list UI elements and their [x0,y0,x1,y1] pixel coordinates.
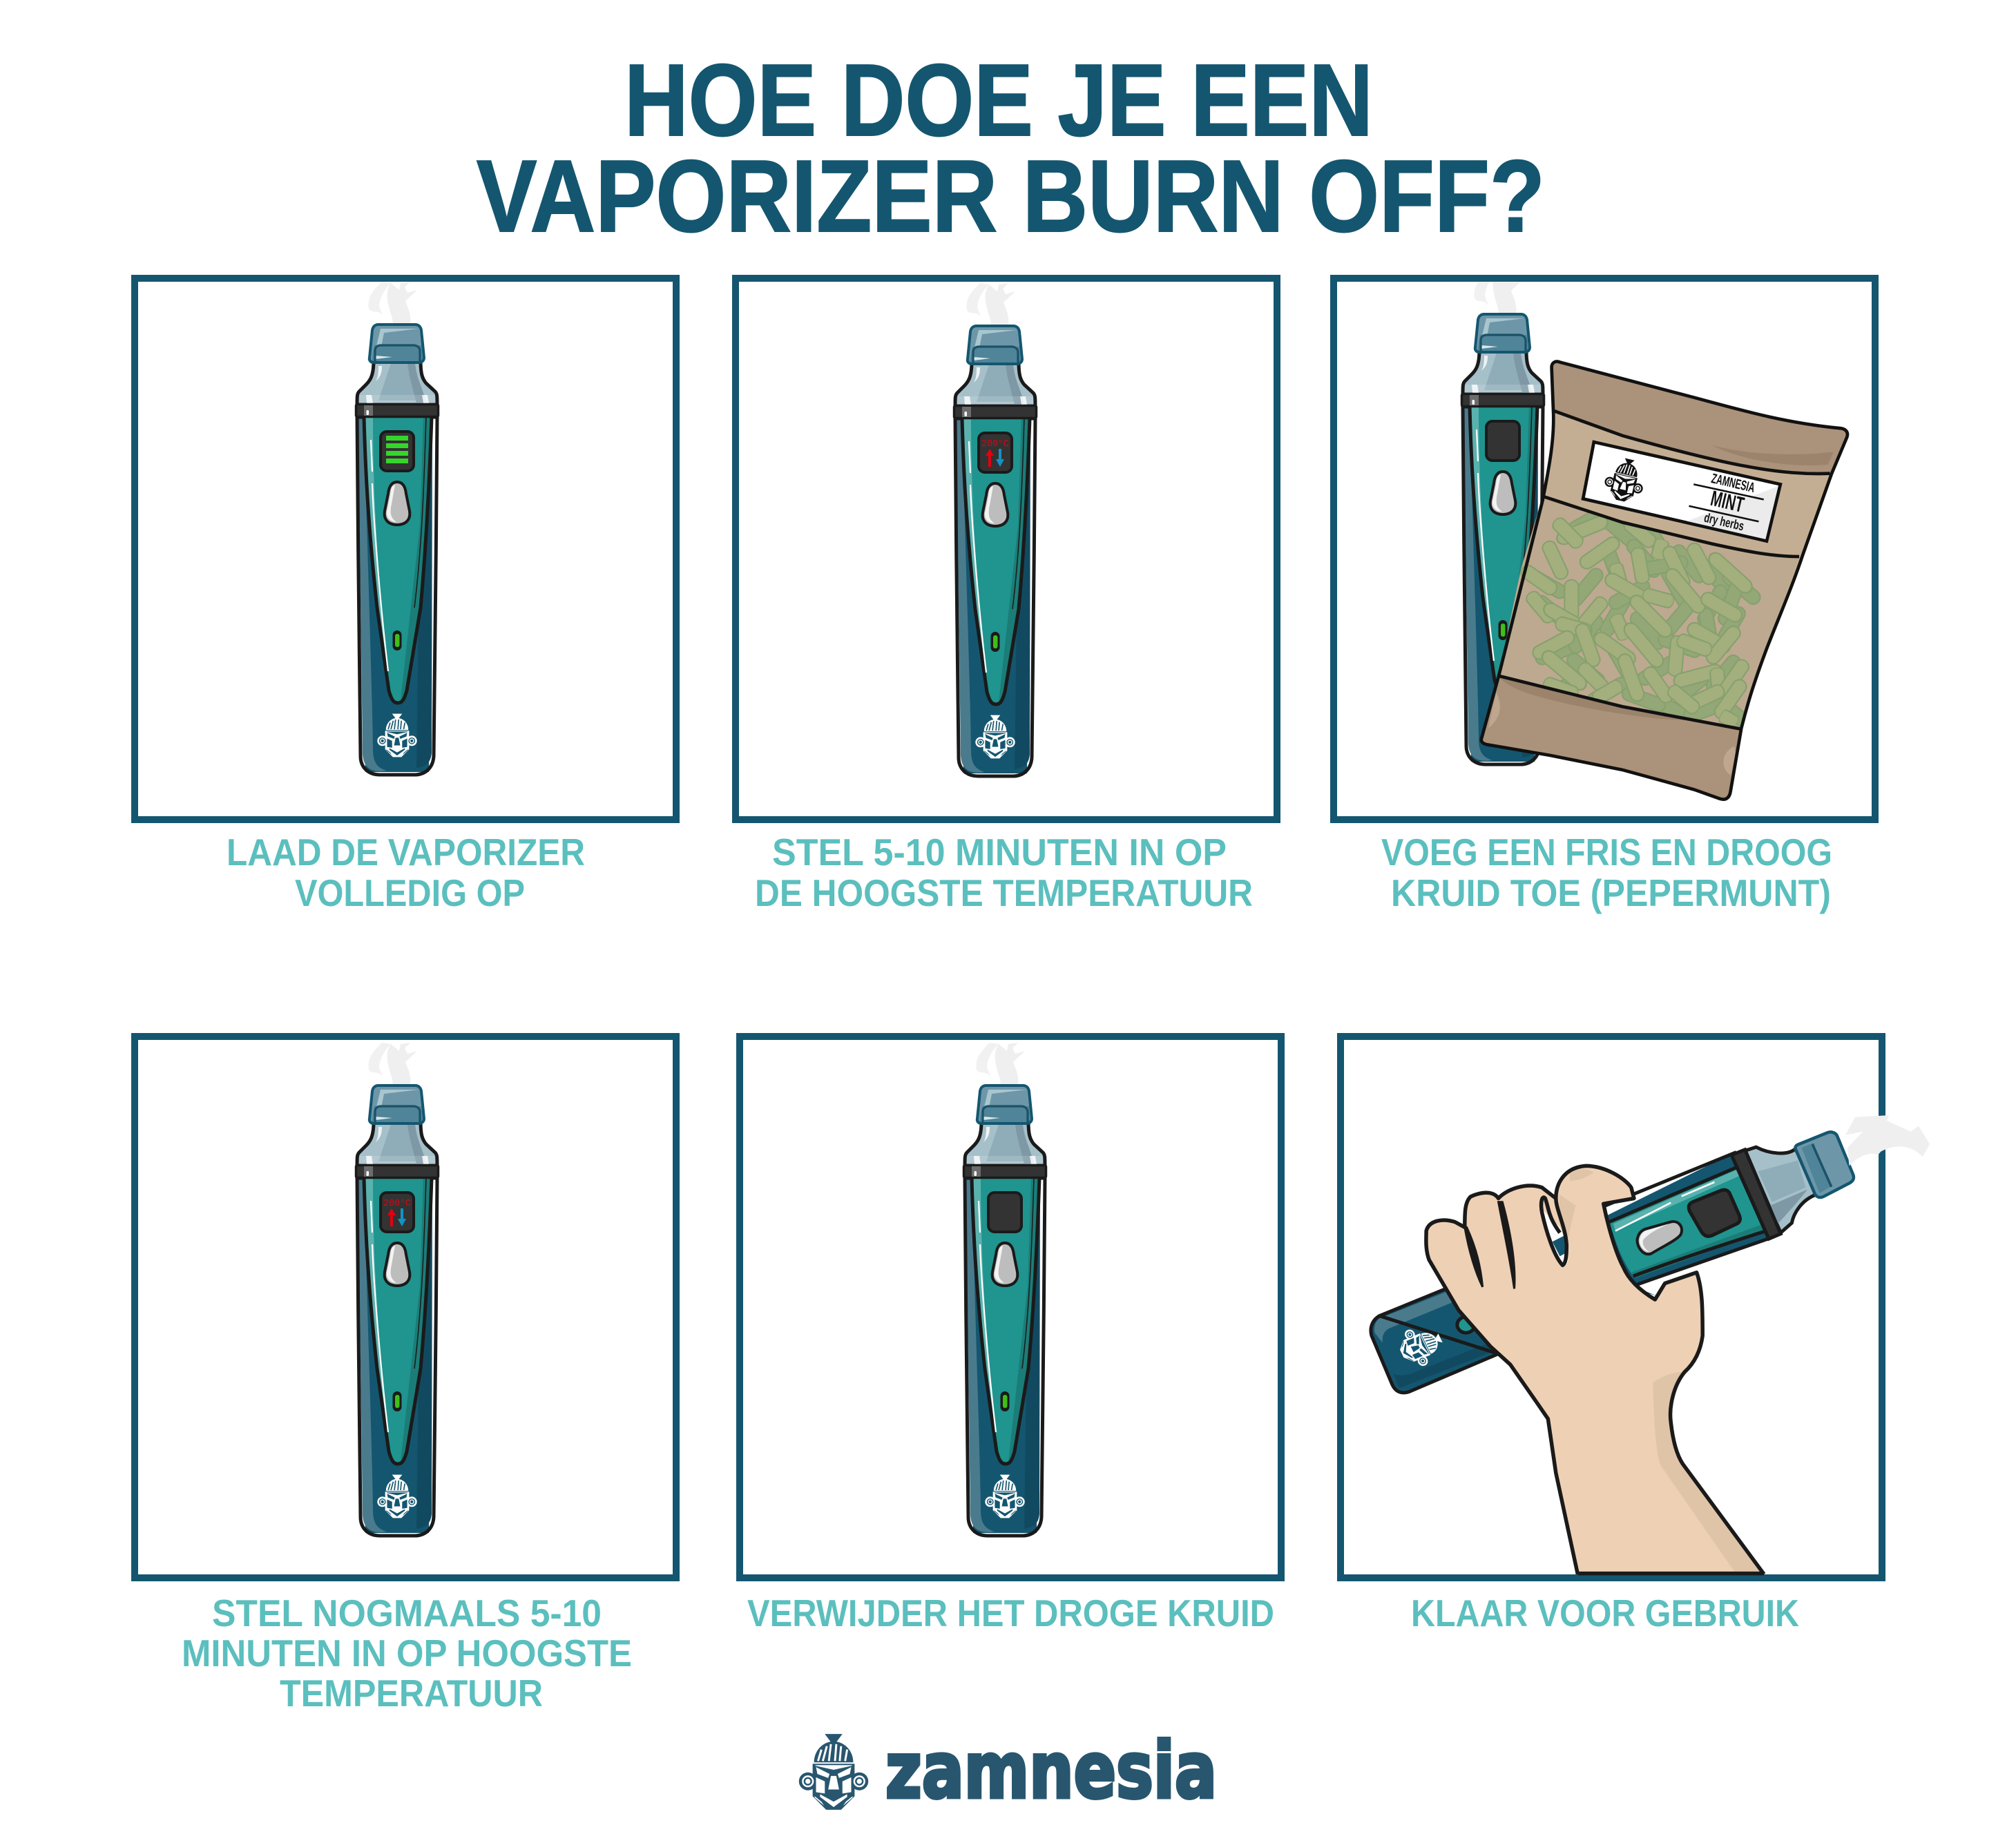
smoke [368,282,417,324]
bag outline [1481,362,1847,800]
caption: step 4 [182,1592,632,1715]
caption: step 3: VOEG EEN FRIS EN DROOG [1381,831,1832,874]
bag label: MINT [1709,486,1746,517]
herbs [1519,505,1763,731]
vaporizer lower part [1371,1285,1499,1393]
smoke [1845,1115,1930,1166]
icon: vaporizer blank screen [964,1043,1046,1536]
caption: step 1 [227,831,585,914]
panel: step 3 [1334,271,1875,820]
title: HOE DOE JE EEN [624,44,1373,157]
caption: step 1: VOLLEDIG OP [295,871,525,914]
wordmark: zamnesia [885,1726,1217,1816]
caption: step 4: STEL NOGMAALS 5-10 [212,1592,602,1634]
bag top seal [1552,362,1847,474]
bag label [1583,442,1780,541]
caption: step 2: DE HOOGSTE TEMPERATUUR [755,871,1253,914]
icon: vaporizer temperature [356,1043,438,1536]
screen: battery bars [381,432,414,471]
caption: step 2: STEL 5-10 MINUTEN IN OP [772,831,1227,874]
panel: step 5 [740,1036,1281,1578]
caption: step 4: TEMPERATUUR [280,1672,543,1715]
caption: step 2 [755,831,1253,914]
screen: temperature [979,433,1012,472]
icon: vaporizer temperature [954,283,1036,776]
hand [1426,1166,1764,1574]
icon: hand holding vaporizer [1371,1115,1930,1574]
bag label: ZAMNESIA [1710,471,1756,496]
title [477,44,1545,253]
caption: step 6: KLAAR VOOR GEBRUIK [1411,1592,1799,1634]
logo: zamnesia [800,1726,1217,1816]
icon: mask [800,1734,867,1810]
screen: temperature: 200°C [981,438,1009,450]
panel: step 6 [1341,1036,1930,1578]
caption: step 4: MINUTEN IN OP HOOGSTE [182,1632,632,1675]
caption: step 3: KRUID TOE (PEPERMUNT) [1391,871,1831,914]
icon: vaporizer blank screen [1461,271,1544,764]
bag label: dry herbs [1702,510,1745,533]
vaporizer upper part [1552,1132,1854,1296]
caption: step 5: VERWIJDER HET DROGE KRUID [747,1592,1274,1634]
panel: step 1 [135,278,676,820]
screen: temperature [381,1193,414,1232]
panel: step 4 [135,1036,676,1578]
caption: step 3 [1381,831,1832,914]
panel: step 2 [736,278,1277,820]
icon: vaporizer full battery [356,325,438,775]
bag window [1499,496,1799,729]
title: VAPORIZER BURN OFF? [477,139,1545,253]
icon: bag of mint [1481,362,1847,800]
caption: step 1: LAAD DE VAPORIZER [227,831,585,874]
bag bottom seal [1481,676,1740,800]
screen: temperature: 200°C [383,1198,411,1209]
